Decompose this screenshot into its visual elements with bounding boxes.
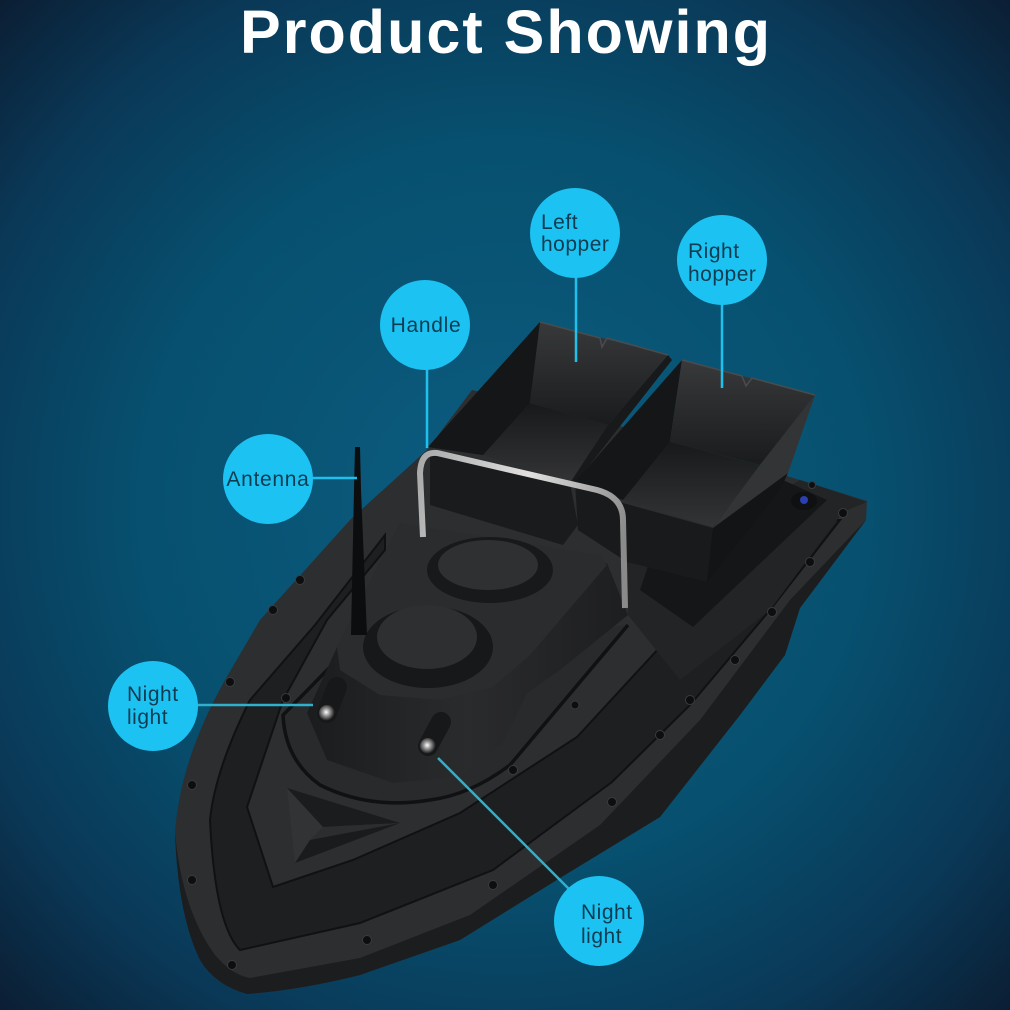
callout: night light right: light bbox=[581, 925, 622, 948]
front hatch bbox=[363, 605, 493, 688]
right hopper bbox=[575, 360, 815, 582]
callout: night light left: Night bbox=[127, 683, 179, 706]
dark deck band bbox=[210, 520, 840, 950]
handle bbox=[420, 453, 625, 608]
title: Product Showing bbox=[240, 0, 770, 66]
cabin platform groove bbox=[283, 625, 628, 803]
callout: handle: Handle bbox=[391, 314, 461, 337]
lamp housing right bbox=[428, 722, 441, 746]
rear hatch bbox=[427, 537, 553, 603]
callout: night light left bbox=[108, 661, 313, 751]
antenna bbox=[351, 447, 367, 635]
night light ball left bbox=[319, 705, 335, 721]
left hopper bbox=[428, 322, 672, 545]
callout: left hopper bbox=[530, 188, 620, 362]
callout: night light left: light bbox=[127, 706, 168, 729]
cabin bbox=[307, 523, 628, 783]
callout: antenna: Antenna bbox=[226, 468, 310, 491]
boat bbox=[175, 322, 867, 994]
callout: right hopper bbox=[677, 215, 767, 388]
callout: night light right: Night bbox=[581, 901, 633, 924]
bow emblem bbox=[287, 788, 400, 863]
callout: handle bbox=[380, 280, 470, 448]
callout: antenna bbox=[223, 434, 357, 524]
callout: left hopper: hopper bbox=[541, 233, 609, 256]
night light ball right bbox=[420, 738, 436, 754]
callout: night light right bbox=[438, 758, 644, 966]
callout: right hopper: hopper bbox=[688, 263, 756, 286]
rim shadow edge bbox=[175, 520, 866, 994]
hopper well bbox=[640, 480, 827, 627]
lamp housing left bbox=[327, 687, 337, 713]
stern deck bbox=[627, 480, 867, 680]
callout: left hopper: Left bbox=[541, 211, 578, 234]
hull screws bbox=[188, 482, 848, 970]
rear camera bbox=[791, 492, 817, 510]
callout: right hopper: Right bbox=[688, 240, 740, 263]
hull bbox=[175, 390, 867, 994]
